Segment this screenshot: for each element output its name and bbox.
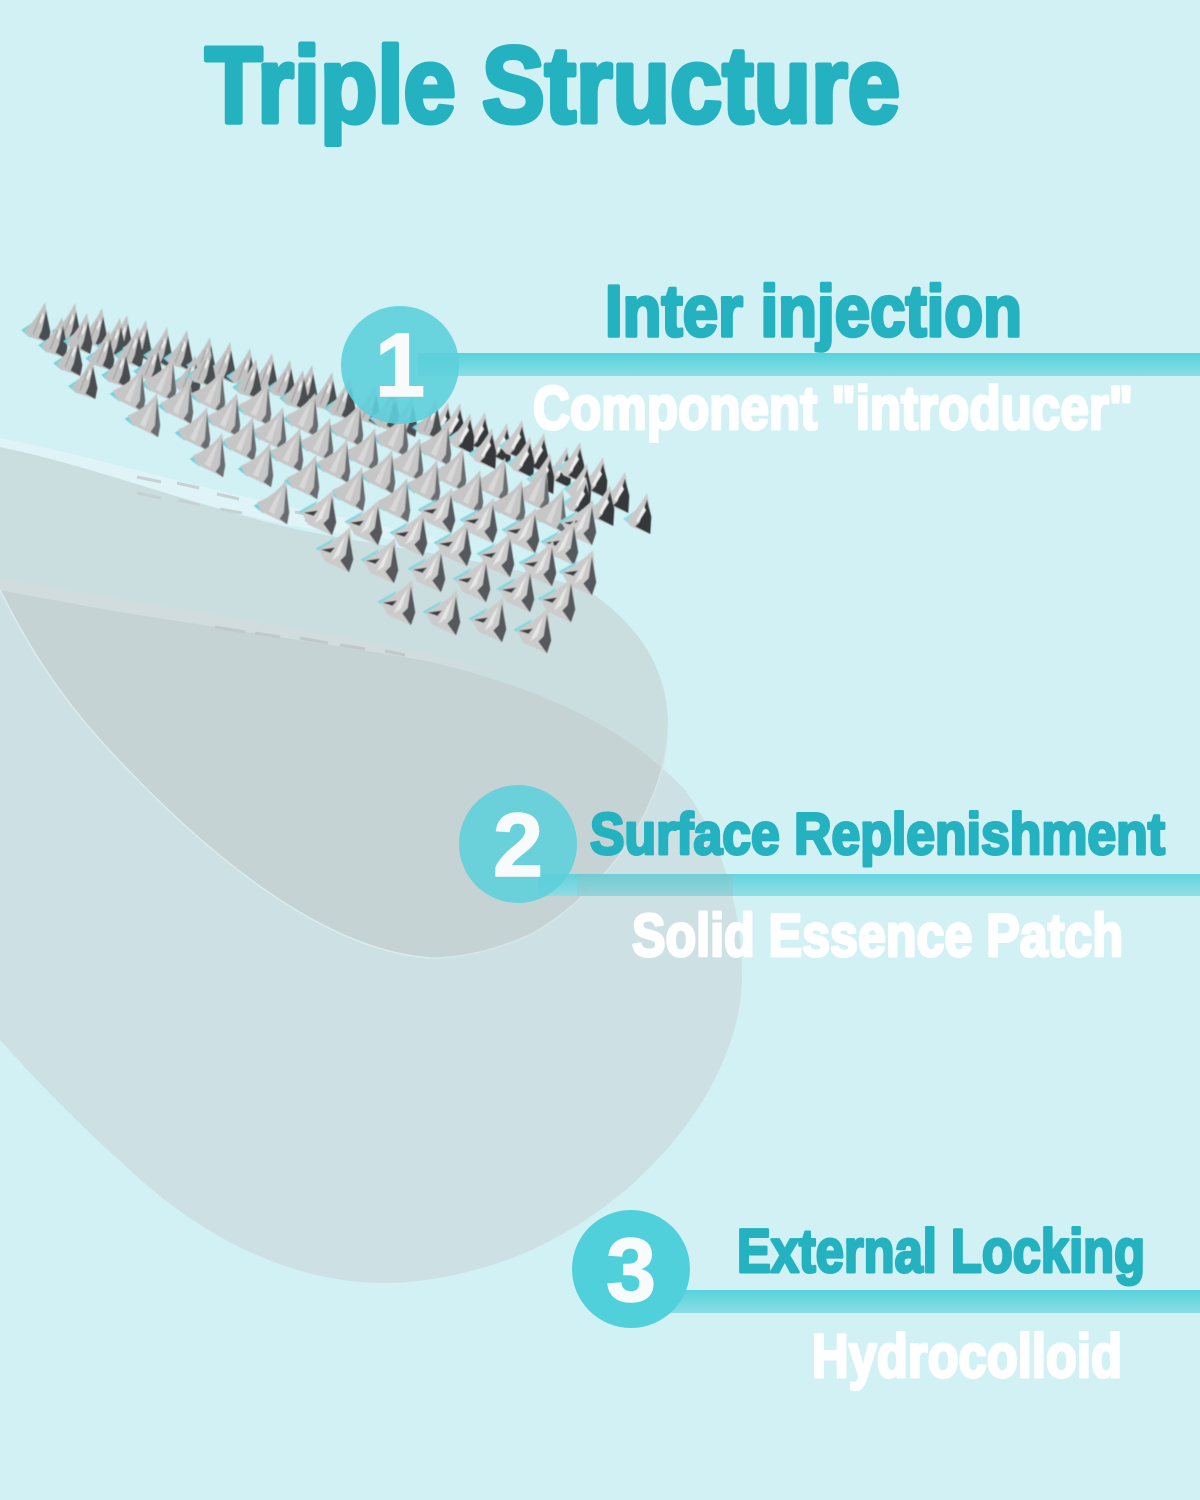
panel: hydrocolloid lower patch	[0, 578, 742, 1283]
title: Triple Structure	[205, 24, 900, 145]
callout 1: inter injection	[341, 272, 1200, 442]
connector bar 3	[660, 1290, 1200, 1313]
number badge 3	[572, 1210, 690, 1328]
callout 3: external locking	[572, 1210, 1200, 1390]
number 3: 3	[606, 1221, 656, 1321]
connector bar 2	[538, 874, 1200, 896]
microneedle array	[21, 302, 651, 653]
callout 2: surface replenishment	[459, 785, 1200, 969]
connector bar 1	[418, 353, 1200, 376]
number 1: 1	[375, 316, 425, 416]
heading: inter injection: Inter injection	[605, 272, 1022, 352]
number badge 2	[459, 785, 577, 903]
number badge 1	[341, 306, 459, 424]
panel: solid essence upper patch	[0, 438, 668, 958]
label: hydrocolloid: Hydrocolloid	[812, 1322, 1122, 1390]
bar shade over patch	[577, 874, 733, 896]
number 2: 2	[493, 796, 543, 896]
